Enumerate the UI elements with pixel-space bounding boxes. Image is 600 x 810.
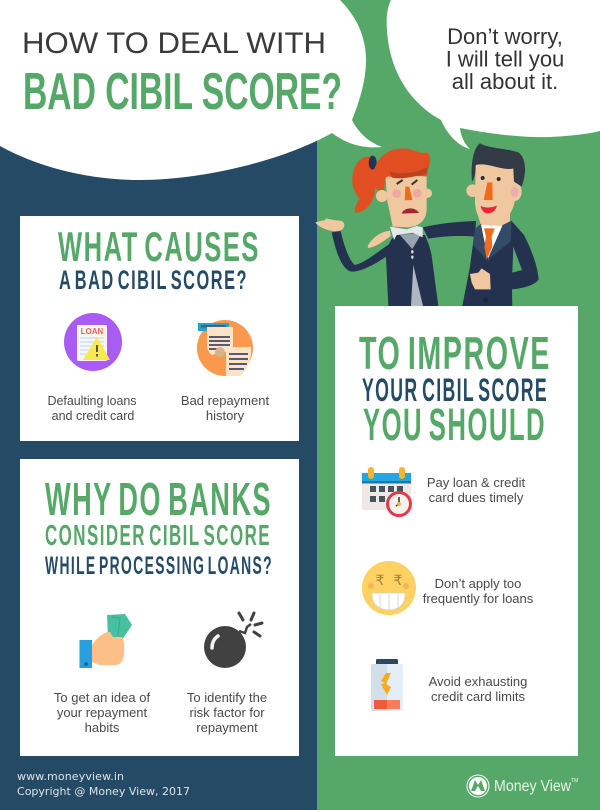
- man neck: [477, 210, 510, 228]
- label: pay dues: card dues timely: [429, 490, 524, 505]
- man jacket button: [483, 297, 488, 303]
- bubble text: Don’t worry,: [447, 24, 563, 49]
- icon: low battery: [371, 659, 403, 711]
- label: repayment habits: habits: [85, 720, 120, 735]
- label: apply frequently: Don’t apply too: [435, 576, 521, 591]
- man tie: [484, 228, 495, 259]
- label: credit limits: Avoid exhausting: [429, 674, 527, 689]
- label: credit limits: credit card limits: [431, 689, 525, 704]
- man fist: [470, 268, 491, 289]
- woman eyes: [397, 180, 417, 185]
- label: risk factor: [187, 690, 267, 735]
- woman torso: [386, 235, 438, 306]
- label: credit limits: [429, 674, 527, 704]
- woman grey top: [400, 233, 422, 249]
- man's hand on shoulder: [368, 231, 391, 248]
- panel: why do banks: [20, 459, 299, 756]
- label: risk factor: To identify the: [187, 690, 267, 705]
- woman right ear: [423, 189, 432, 198]
- man nose: [484, 182, 493, 200]
- heading: why do banks: WHY DO BANKS: [45, 473, 272, 525]
- man body: [462, 221, 539, 306]
- footer text: Copyright @ Money View, 2017: [17, 785, 190, 798]
- man head: [475, 162, 515, 225]
- background: green right half: [317, 0, 600, 810]
- logo: money view: [467, 775, 578, 797]
- label: apply frequently: [423, 576, 534, 606]
- label: defaulting loans: [48, 394, 136, 423]
- icon: bomb: [204, 613, 262, 668]
- speech bubble: reassurance: [387, 0, 600, 149]
- bubble text: all about it.: [452, 69, 558, 94]
- gap between man's arm and torso: [512, 247, 522, 273]
- label: pay dues: Pay loan & credit: [427, 475, 526, 490]
- title: BAD CIBIL SCORE?: [23, 63, 342, 121]
- speech bubble: title: [0, 0, 382, 180]
- heading: what causes: WHAT CAUSES: [58, 223, 260, 270]
- man ear inner: [511, 187, 518, 197]
- woman neck and face: [385, 170, 427, 227]
- label: bad repayment: Bad repayment: [181, 393, 269, 408]
- label: pay dues: [427, 475, 526, 505]
- label: risk factor: repayment: [196, 720, 258, 735]
- icon: loan warning: [64, 313, 122, 371]
- icon: repayment history: [197, 320, 253, 376]
- man ear left: [466, 184, 479, 197]
- label: bad repayment: [181, 393, 269, 423]
- woman raised arm: [332, 231, 389, 272]
- woman ponytail: [352, 156, 375, 213]
- man eyes: [481, 176, 485, 180]
- woman buttons: [409, 251, 416, 258]
- label: repayment habits: [54, 690, 150, 735]
- illustration: two business people: [315, 143, 539, 306]
- label: bad repayment: history: [206, 408, 245, 423]
- man's arm around woman: [423, 221, 476, 239]
- icon: rupee smiley: [362, 561, 416, 615]
- logo: money view: TM: [571, 778, 578, 784]
- heading: while processing loans: WHILE PROCESSING LOANS?: [45, 552, 273, 580]
- footer text: [17, 770, 190, 798]
- woman mouth: [402, 208, 419, 214]
- background: navy left half: [0, 0, 317, 810]
- man mouth: [481, 206, 497, 213]
- hair tie: [369, 156, 377, 170]
- bubble text: [446, 24, 564, 94]
- woman cheek: [413, 189, 422, 198]
- heading: consider cibil score: CONSIDER CIBIL SCORE: [45, 520, 271, 552]
- label: repayment habits: your repayment: [57, 705, 148, 720]
- panel: what causes: [20, 216, 299, 441]
- man eye: [497, 177, 501, 181]
- woman fringe shadow: [390, 167, 428, 178]
- icon: hand with cash: [80, 614, 132, 668]
- man lapels: [473, 221, 512, 260]
- woman shirt strip: [411, 265, 423, 306]
- label: risk factor: risk factor for: [189, 705, 265, 720]
- title: HOW TO DEAL WITH: [22, 27, 326, 60]
- icon: rupee smiley: ₹: [376, 572, 385, 588]
- bubble text: I will tell you: [446, 46, 564, 72]
- icon: rupee smiley: ₹: [394, 572, 403, 588]
- icon: calendar clock: [362, 467, 411, 516]
- logo: money view: Money View: [494, 778, 572, 795]
- label: defaulting loans: Defaulting loans: [48, 394, 136, 408]
- man hair: [472, 143, 525, 187]
- title: [22, 27, 342, 121]
- label: apply frequently: frequently for loans: [423, 591, 534, 606]
- footer text: www.moneyview.in: [17, 770, 124, 783]
- woman cheeks: [392, 189, 401, 198]
- woman nose: [405, 187, 412, 200]
- icon: loan warning: LOAN: [81, 327, 104, 336]
- woman collar: [390, 226, 423, 240]
- man ear right: [508, 182, 522, 201]
- woman hand open: [315, 218, 344, 231]
- woman hair: [373, 148, 430, 190]
- label: defaulting loans: and credit card: [52, 409, 134, 423]
- panel: to improve: [335, 306, 578, 756]
- man shirt: [481, 225, 503, 260]
- woman ears: [376, 190, 388, 202]
- label: repayment habits: To get an idea of: [54, 690, 150, 705]
- heading: a bad cibil score: A BAD CIBIL SCORE?: [59, 265, 248, 295]
